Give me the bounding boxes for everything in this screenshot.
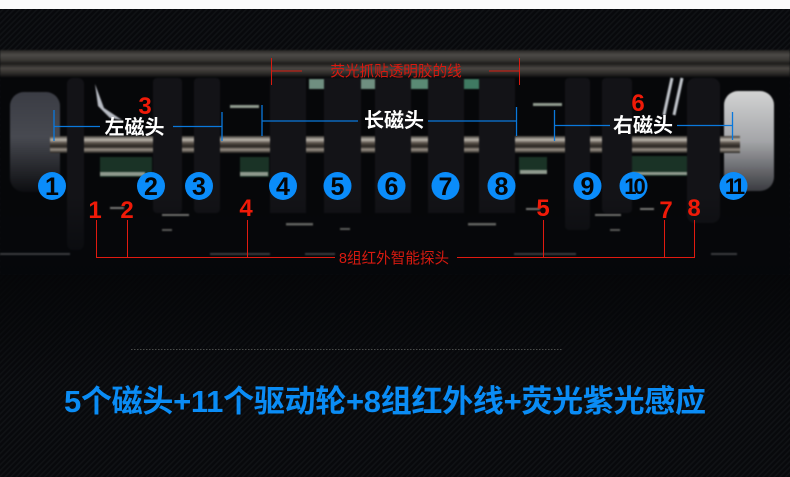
drive belts bbox=[67, 78, 720, 250]
white wires bbox=[95, 84, 122, 120]
infrared sensor numbers bbox=[88, 195, 701, 224]
infrared sensor numbers: 7 bbox=[659, 197, 673, 224]
drive wheel markers 1 to 11: 9 bbox=[581, 173, 594, 201]
callout: 8 infrared sensors bbox=[88, 195, 701, 267]
top white strip bbox=[0, 0, 790, 9]
drive wheel markers 1 to 11: 5 bbox=[331, 173, 345, 201]
bracket: long magnetic head bbox=[262, 105, 516, 136]
drive wheel markers 1 to 11: 4 bbox=[276, 173, 290, 201]
magnetic head number 6: 6 bbox=[631, 90, 645, 117]
small chrome details bbox=[110, 207, 654, 231]
bottom summary title: 5个磁头+11个驱动轮+8组红外线+荧光紫光感应 bbox=[64, 384, 706, 419]
label: right magnetic head: 右磁头 bbox=[613, 114, 673, 137]
drive wheel markers 1 to 11: 7 bbox=[439, 173, 452, 201]
callout text: 8组红外智能探头 bbox=[339, 249, 449, 267]
drive wheel markers 1 to 11: 1 bbox=[45, 173, 59, 201]
drive wheel markers 1 to 11: 2 bbox=[144, 173, 158, 201]
drive wheel markers 1 to 11: 3 bbox=[192, 173, 206, 201]
infrared sensor numbers: 5 bbox=[536, 195, 550, 222]
right roller bbox=[724, 91, 774, 191]
drive wheel markers 1 to 11: 6 bbox=[385, 173, 398, 201]
upper guide rods bbox=[0, 50, 790, 77]
callout text: 荧光抓贴透明胶的线 bbox=[330, 63, 462, 80]
bracket: right magnetic head bbox=[554, 110, 732, 141]
infrared sensor numbers: 1 bbox=[88, 197, 102, 224]
green circuit boards bbox=[100, 79, 688, 177]
main shaft bbox=[50, 136, 740, 153]
dark band below photo bbox=[0, 275, 790, 385]
dotted separator bbox=[131, 348, 562, 350]
left roller bbox=[10, 92, 60, 192]
panel: machine photo bbox=[0, 50, 790, 275]
callout: fluorescent tape sensor bbox=[272, 58, 520, 85]
drive wheel markers 1 to 11: 10 bbox=[624, 174, 645, 199]
label: left magnetic head: 左磁头 bbox=[104, 116, 164, 139]
label: long magnetic head: 长磁头 bbox=[364, 109, 424, 132]
infrared sensor numbers: 2 bbox=[120, 197, 134, 224]
bracket: left magnetic head bbox=[54, 110, 222, 141]
board highlights bbox=[100, 103, 688, 176]
infrared sensor numbers: 4 bbox=[239, 195, 253, 222]
lower chassis edge bbox=[0, 253, 737, 255]
magnetic head number 3: 3 bbox=[138, 93, 152, 120]
drive wheel markers 1 to 11 bbox=[38, 172, 748, 201]
drive wheel markers 1 to 11: 8 bbox=[495, 173, 509, 201]
machine body bbox=[0, 50, 790, 275]
infrared sensor numbers: 8 bbox=[687, 195, 701, 222]
drive wheel markers 1 to 11: 11 bbox=[725, 174, 745, 199]
